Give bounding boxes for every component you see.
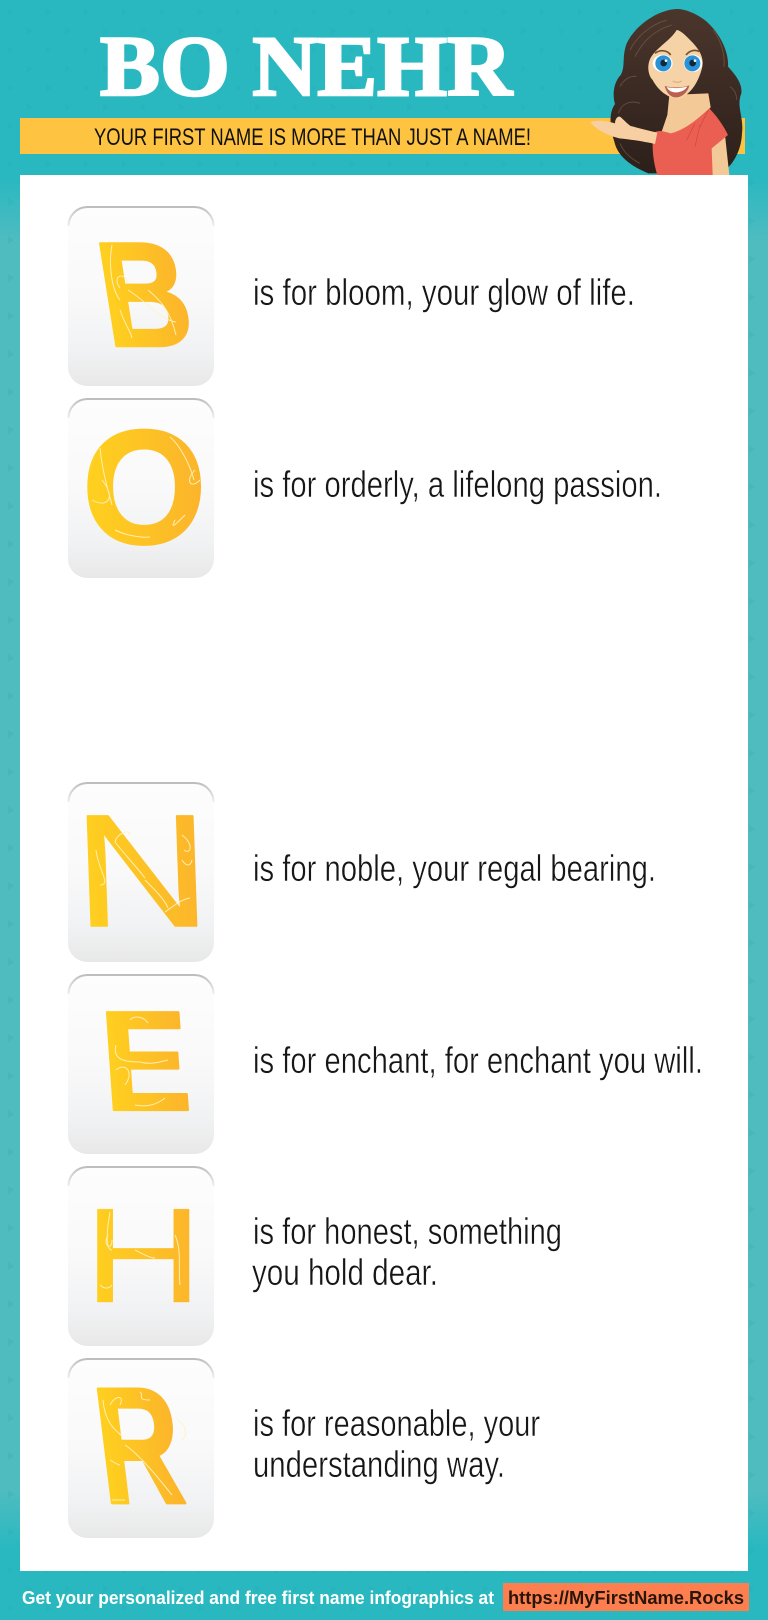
text: R: is for reasonable, your (253, 1403, 540, 1444)
text: H: is for honest, something (253, 1211, 562, 1252)
shirt (653, 108, 728, 175)
shirt folds (687, 110, 708, 147)
text: O: is for orderly, a lifelong passion. (253, 464, 662, 505)
letter: O: O (82, 397, 206, 578)
hand and forearm (590, 117, 657, 144)
eyebrows (655, 50, 699, 55)
hair (611, 9, 742, 173)
text: R (253, 1403, 540, 1485)
right eye (684, 55, 702, 72)
footer (22, 1583, 749, 1611)
row: O (68, 397, 662, 578)
card: H (68, 1167, 214, 1346)
letter: R: R (86, 1354, 192, 1539)
card: E (68, 975, 214, 1154)
card: O (68, 399, 214, 578)
nose (673, 81, 682, 82)
text: N: is for noble, your regal bearing. (253, 848, 656, 889)
card: N (68, 783, 214, 962)
row: R (68, 1354, 540, 1539)
row: N (68, 782, 656, 962)
row: B (68, 207, 635, 386)
text: R: understanding way. (253, 1444, 505, 1485)
title: BO NEHR (100, 18, 513, 114)
card: R (68, 1359, 214, 1538)
row: H (68, 1167, 562, 1346)
face (648, 30, 703, 99)
letter: E: E (96, 983, 195, 1141)
footer link badge: https://MyFirstName.Rocks (508, 1587, 744, 1608)
text: H (252, 1211, 562, 1293)
right arm (708, 135, 729, 175)
text: B: is for bloom, your glow of life. (253, 272, 635, 313)
tagline banner (20, 118, 745, 154)
row: E (68, 975, 703, 1154)
footer text: Get your personalized and free first name infographics at (22, 1587, 494, 1608)
letter: B: B (87, 212, 203, 378)
hair highlights (618, 20, 737, 163)
text: H: you hold dear. (252, 1252, 438, 1293)
illustration: woman presenting (590, 9, 742, 175)
tagline banner: YOUR FIRST NAME IS MORE THAN JUST A NAME! (94, 124, 531, 151)
card: B (68, 207, 214, 386)
mouth (665, 85, 689, 97)
letter: N: N (71, 782, 213, 961)
left eye (653, 55, 673, 72)
neck (662, 93, 711, 135)
letter: H: H (84, 1180, 202, 1331)
